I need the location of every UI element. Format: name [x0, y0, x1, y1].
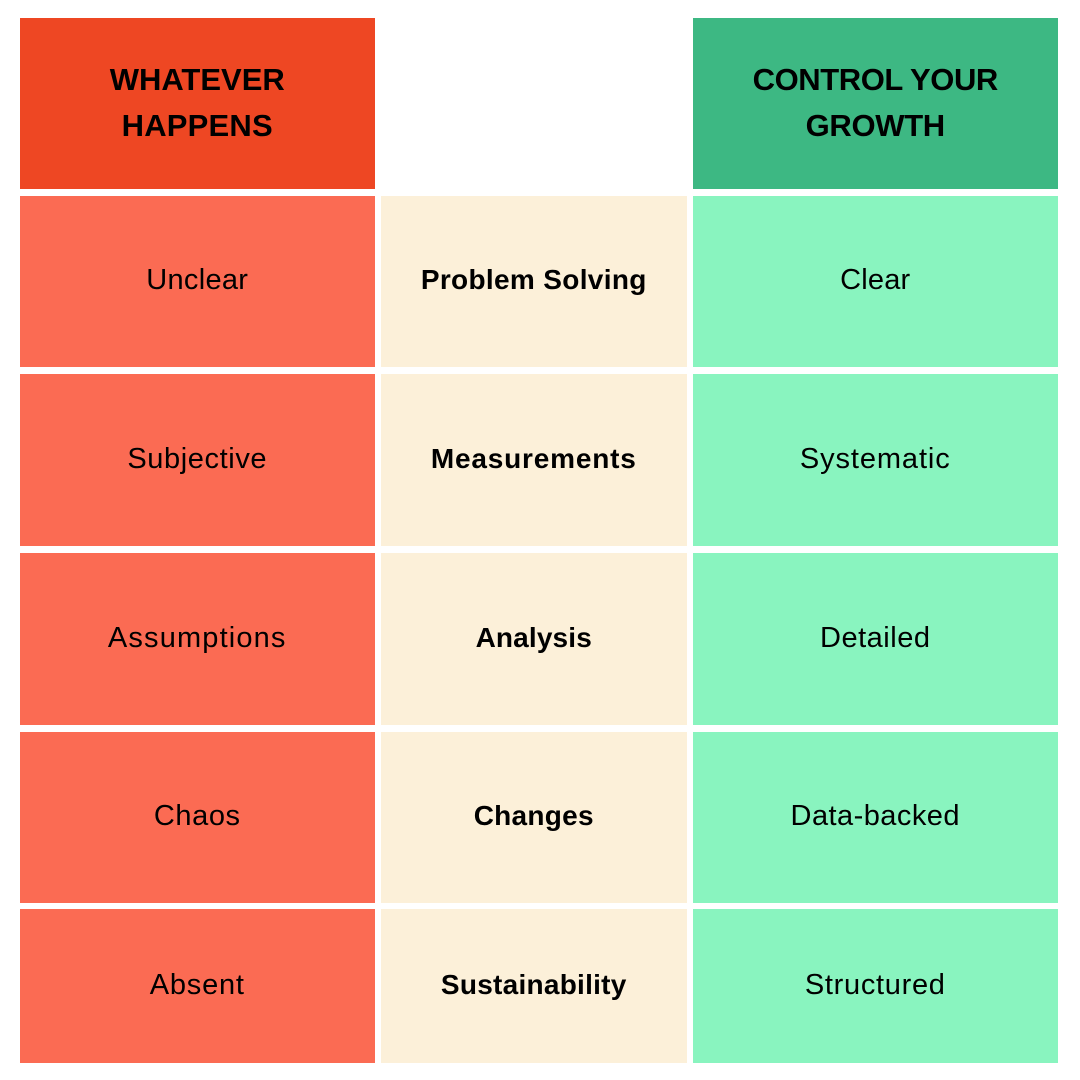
row 4 left: chaos: Chaos — [154, 800, 241, 832]
row 3 right: detailed: Detailed — [820, 622, 930, 654]
header: control your growth: GROWTH — [806, 108, 945, 142]
row 1 middle: problem solving — [381, 196, 686, 366]
row 4 middle: changes: Changes — [474, 800, 594, 831]
row 3 left: assumptions — [20, 553, 374, 725]
row 1 left: unclear: Unclear — [146, 264, 248, 296]
row 2 left: subjective: Subjective — [127, 443, 267, 475]
row 2 middle: measurements — [381, 374, 686, 546]
row 5 middle: sustainability — [381, 909, 686, 1062]
header: whatever happens: WHATEVER — [110, 62, 285, 96]
row 1 right: clear — [693, 196, 1058, 366]
row 5 right: structured: Structured — [805, 969, 946, 1001]
row 1 left: unclear — [20, 196, 374, 366]
header: whatever happens: HAPPENS — [122, 108, 273, 142]
row 3 middle: analysis — [381, 553, 686, 725]
row 4 right: data-backed: Data-backed — [791, 800, 960, 832]
row 2 middle: measurements: Measurements — [431, 443, 637, 474]
row 2 right: systematic — [693, 374, 1058, 546]
header: control your growth — [693, 18, 1058, 189]
row 5 middle: sustainability: Sustainability — [441, 969, 627, 1000]
row 1 right: clear: Clear — [840, 264, 910, 296]
row 1 middle: problem solving: Problem Solving — [421, 264, 647, 295]
row 2 left: subjective — [20, 374, 374, 546]
row 3 middle: analysis: Analysis — [476, 622, 592, 653]
row 2 right: systematic: Systematic — [800, 443, 951, 475]
row 3 left: assumptions: Assumptions — [108, 622, 287, 654]
row 4 left: chaos — [20, 732, 374, 902]
row 5 left: absent — [20, 909, 374, 1062]
row 3 right: detailed — [693, 553, 1058, 725]
header: whatever happens — [20, 18, 374, 189]
row 4 middle: changes — [381, 732, 686, 902]
row 4 right: data-backed — [693, 732, 1058, 902]
header: control your growth: CONTROL YOUR — [753, 62, 998, 96]
row 5 right: structured — [693, 909, 1058, 1062]
row 5 left: absent: Absent — [150, 969, 245, 1001]
